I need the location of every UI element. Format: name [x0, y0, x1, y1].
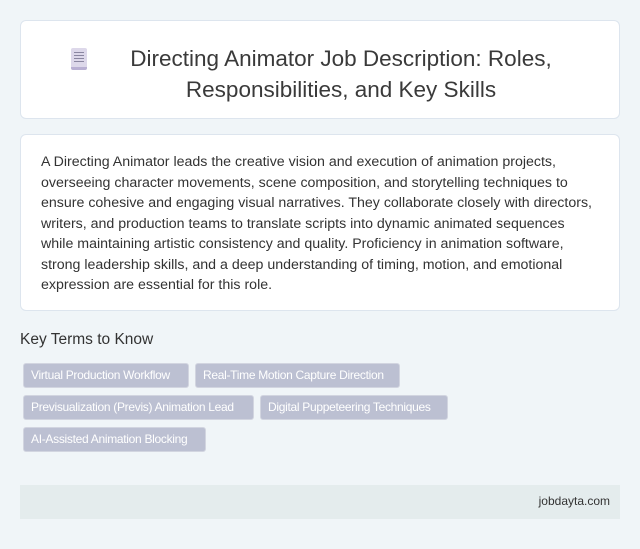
tag [23, 363, 189, 388]
footer [20, 485, 620, 519]
title: Directing Animator Job Description: Roles, Responsibilities, and Key Skills [130, 46, 552, 102]
icon: document [71, 48, 87, 70]
tag [23, 395, 254, 420]
key terms heading: Key Terms to Know [20, 331, 153, 348]
tag [23, 427, 206, 452]
tag [260, 395, 448, 420]
header card [20, 20, 620, 119]
tag: Digital Puppeteering Techniques [268, 400, 431, 414]
description text: A Directing Animator leads the creative vision and execution of animation projects, overseeing character movements, scene composition, and storytelling techniques to ensure cohesive and engaging visual narratives. They collaborate closely with directors, writers, and production teams to translate scripts into dynamic animated sequences while maintaining artistic consistency and quality. Proficiency in animation software, strong leadership skills, and a deep understanding of timing, motion, and emotional expression are essential for this role. [41, 154, 592, 293]
description card [20, 134, 620, 311]
tag: Virtual Production Workflow [31, 368, 170, 382]
tag: Real-Time Motion Capture Direction [203, 368, 384, 382]
tag: Previsualization (Previs) Animation Lead [31, 400, 234, 414]
tag [195, 363, 400, 388]
footer text: jobdayta.com [539, 494, 610, 508]
tag: AI-Assisted Animation Blocking [31, 432, 187, 446]
